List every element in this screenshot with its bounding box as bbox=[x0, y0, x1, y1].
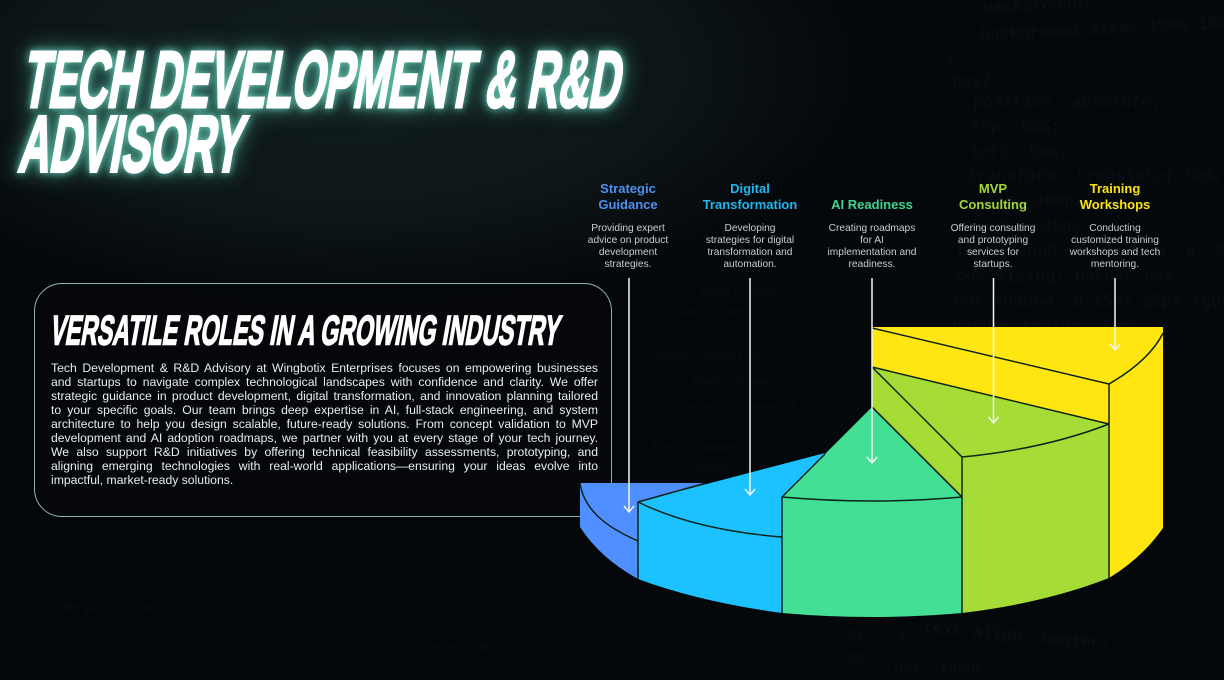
title bbox=[7, 36, 636, 189]
background code texture: box-sizing: border-box; bbox=[956, 267, 1184, 286]
label: training workshops: Training bbox=[1090, 181, 1140, 196]
arrow: mvp consulting bbox=[988, 278, 998, 423]
background code texture: color: Canvas $ bbox=[680, 400, 797, 415]
label: training workshops bbox=[1070, 181, 1160, 270]
label: ai readiness: AI Readiness bbox=[831, 197, 913, 212]
panel: versatile roles bbox=[34, 283, 612, 517]
panel body text: Tech Development & R&D Advisory at Wingbotix Enterprises focuses on empowering businesses bbox=[51, 361, 598, 375]
label: training workshops: customized training bbox=[1071, 235, 1159, 246]
label: ai readiness: Creating roadmaps bbox=[829, 223, 915, 234]
label: digital transformation bbox=[702, 181, 797, 270]
label: ai readiness bbox=[828, 197, 916, 270]
panel body text: and startups to navigate complex technological landscapes with confidence and clarity. We offer bbox=[51, 375, 598, 389]
label: digital transformation: Developing bbox=[724, 223, 775, 234]
label: mvp consulting: services for bbox=[967, 247, 1019, 258]
background code texture: font: Open ; bbox=[690, 375, 784, 390]
background code texture: border-radius: 10px; bbox=[952, 317, 1150, 336]
background code texture: font: Copper; bbox=[650, 440, 751, 455]
title: ADVISORY bbox=[14, 100, 253, 189]
panel body text: impactful, market-ready solutions. bbox=[51, 473, 233, 487]
label: strategic guidance: Guidance bbox=[598, 197, 658, 212]
segment: strategic guidance (blue) bbox=[580, 483, 706, 579]
panel body text: strategic guidance in product development, digital transformation, and innovation planning tailored bbox=[51, 389, 598, 403]
label: digital transformation: automation. bbox=[723, 259, 777, 270]
label: strategic guidance: strategies. bbox=[604, 259, 652, 270]
title: TECH DEVELOPMENT & R&D bbox=[18, 36, 631, 125]
panel body text: to your specific goals. Our team brings deep expertise in AI, full-stack engineering, and system bbox=[51, 403, 598, 417]
background code texture: margin: 0 auto; bbox=[60, 600, 177, 615]
background code texture: width: 400px; bbox=[965, 192, 1094, 211]
panel body text: We also support R&D initiatives by offering technical feasibility assessments, prototyping, and bbox=[51, 445, 598, 459]
background code texture: height: 40px; bbox=[963, 217, 1092, 236]
background code texture: return data; bbox=[420, 640, 514, 655]
label: strategic guidance: Providing expert bbox=[591, 223, 665, 234]
arrow: digital transformation bbox=[745, 278, 755, 495]
background code texture: left: 50%; bbox=[969, 143, 1068, 162]
label: mvp consulting: Offering consulting bbox=[951, 223, 1035, 234]
background code texture: content: input bbox=[330, 240, 439, 255]
label: mvp consulting: startups. bbox=[973, 259, 1013, 270]
background code texture: top: 50%; bbox=[971, 118, 1060, 137]
background code texture: text-align: center; bbox=[922, 618, 1111, 653]
background code texture: position: absolute; bbox=[973, 93, 1161, 112]
label: training workshops: workshops and tech bbox=[1070, 247, 1160, 258]
label: digital transformation: Transformation bbox=[703, 197, 797, 212]
background code texture: font: Sans; bbox=[700, 285, 786, 300]
label: ai readiness: implementation and bbox=[828, 247, 916, 258]
arrow: strategic guidance bbox=[624, 278, 634, 512]
segment outlines bbox=[580, 328, 1163, 613]
label: strategic guidance: Strategic bbox=[600, 181, 656, 196]
panel body text: development and AI adoption roadmaps, we partner with you at every stage of your tech journey. bbox=[51, 431, 598, 445]
label: mvp consulting bbox=[951, 181, 1035, 270]
label: training workshops: Conducting bbox=[1089, 223, 1141, 234]
segment: digital transformation (cyan) bbox=[638, 453, 825, 613]
background code texture: color: Controls bbox=[660, 305, 777, 320]
label: ai readiness: readiness. bbox=[848, 259, 896, 270]
arrow: ai readiness bbox=[867, 278, 877, 463]
label: digital transformation: Digital bbox=[730, 181, 770, 196]
label: mvp consulting: Consulting bbox=[959, 197, 1027, 212]
label: training workshops: mentoring. bbox=[1091, 259, 1139, 270]
background code texture: color: true bbox=[690, 462, 776, 477]
background code texture: 32 bbox=[848, 652, 865, 668]
label: strategic guidance: development bbox=[599, 247, 657, 258]
panel body text: architecture to help you design scalable, future-ready solutions. From concept validation to MVP bbox=[51, 417, 598, 431]
background code texture: .box .input bbox=[885, 661, 984, 678]
segment: ai readiness (green) bbox=[782, 407, 962, 617]
background code texture: 31 } bbox=[848, 627, 907, 643]
panel body text bbox=[51, 361, 598, 487]
label: mvp consulting: MVP bbox=[979, 181, 1007, 196]
label: digital transformation: transformation and bbox=[708, 247, 792, 258]
label: training workshops: Workshops bbox=[1080, 197, 1150, 212]
label: mvp consulting: and prototyping bbox=[958, 235, 1028, 246]
background code texture: .box{ bbox=[942, 72, 992, 91]
label: ai readiness: for AI bbox=[860, 235, 884, 246]
background code texture: color: Granite; bbox=[650, 350, 767, 365]
segment: training workshops (yellow) bbox=[872, 327, 1163, 578]
label: strategic guidance bbox=[588, 181, 668, 270]
arrow: training workshops bbox=[1110, 278, 1120, 350]
label: digital transformation: strategies for digital bbox=[706, 235, 794, 246]
segment: mvp consulting (lime) bbox=[872, 367, 1109, 613]
background code texture: } bbox=[945, 50, 955, 69]
label: strategic guidance: advice on product bbox=[588, 235, 668, 246]
panel body text: aligning emerging technologies with real-world applications—ensuring your ideas evolve into bbox=[51, 459, 598, 473]
